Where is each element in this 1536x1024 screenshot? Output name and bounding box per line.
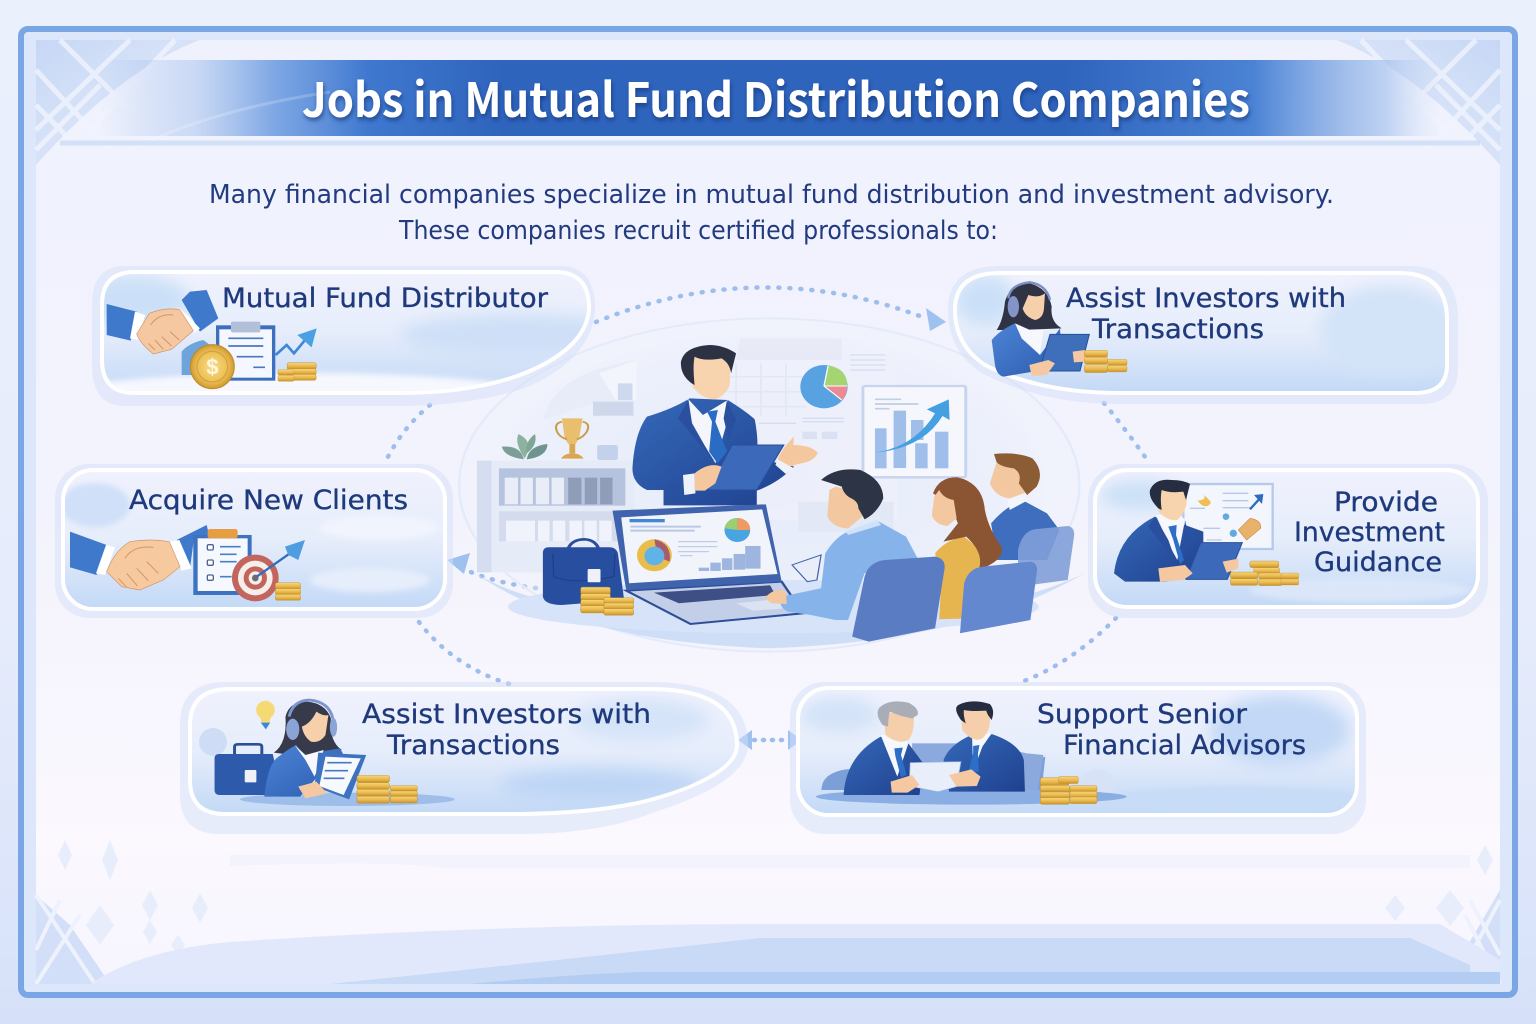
card: Acquire New Clients <box>55 464 453 618</box>
title banner <box>60 60 1480 150</box>
label: Assist Investors with <box>362 699 651 730</box>
label: Mutual Fund Distributor <box>222 283 549 314</box>
label: Financial Advisors <box>1063 730 1306 761</box>
front chair <box>852 557 945 642</box>
card surface <box>790 682 1380 834</box>
card: Support Senior Financial Advisors <box>790 682 1380 834</box>
icon: handshake, clipboard, coin <box>107 290 317 389</box>
floating pie chart <box>800 365 848 408</box>
card: Assist Investors with Transactions (bottom left) <box>180 682 748 834</box>
label <box>1066 283 1346 345</box>
label <box>1294 487 1445 578</box>
label <box>1037 699 1306 761</box>
label: Transactions <box>386 730 560 761</box>
corner lattice: bottom left <box>36 840 208 984</box>
corner lattice: top right <box>1336 40 1500 165</box>
card: Assist Investors with Transactions (top right) <box>948 266 1460 404</box>
briefcase <box>543 539 624 605</box>
card surface <box>92 266 595 406</box>
icon: two advisors with document and coins <box>816 701 1127 805</box>
icon: handshake, checklist, target <box>70 525 305 601</box>
presenter <box>632 345 818 505</box>
coins on table <box>581 587 634 615</box>
back man <box>990 453 1059 560</box>
dotted connectors <box>384 287 1150 684</box>
connector arrowheads <box>447 308 946 750</box>
label: Investment <box>1294 517 1445 548</box>
card surface <box>948 266 1460 404</box>
laptop <box>613 504 803 624</box>
card: Provide Investment Guidance <box>1088 464 1488 618</box>
title text: Jobs in Mutual Fund Distribution Companies <box>302 62 1250 131</box>
double arrow dots <box>754 738 788 742</box>
intro text: These companies recruit certified professionals to: <box>398 216 998 246</box>
icon: trophy <box>556 418 588 459</box>
bottom waves <box>90 924 1500 984</box>
label <box>362 699 651 761</box>
icon: plant <box>502 434 547 459</box>
card surface <box>180 682 748 834</box>
intro text <box>209 180 1334 246</box>
icon: handshake, clipboard, coin: $ <box>206 355 218 380</box>
central scene <box>459 318 1084 652</box>
icon: woman with document, briefcase, bulb <box>215 700 455 806</box>
icon: woman with tablet <box>992 282 1127 377</box>
intro text: Many financial companies specialize in mutual fund distribution and investment advisory. <box>209 180 1334 210</box>
label: Assist Investors with <box>1066 283 1346 314</box>
corner lattice: bottom right <box>1385 845 1500 984</box>
bookshelf <box>477 445 634 572</box>
icon: adviser with chart board <box>1114 480 1299 586</box>
label: Transactions <box>1091 314 1264 345</box>
card surface <box>1088 464 1488 618</box>
label: Support Senior <box>1037 699 1248 730</box>
growth chart board <box>863 386 966 477</box>
faint band above bottom area <box>230 855 1470 868</box>
label: Guidance <box>1314 547 1442 578</box>
woman <box>932 477 1002 619</box>
middle chair <box>960 562 1037 633</box>
card: Mutual Fund Distributor <box>92 266 595 406</box>
seated man <box>765 469 918 620</box>
back chair <box>1018 526 1074 587</box>
backdrop oval <box>459 318 1084 652</box>
label: Provide <box>1334 487 1438 518</box>
faint office background <box>543 338 898 532</box>
card surface <box>55 464 453 618</box>
corner lattice: top left <box>36 40 200 165</box>
label: Acquire New Clients <box>129 485 408 516</box>
